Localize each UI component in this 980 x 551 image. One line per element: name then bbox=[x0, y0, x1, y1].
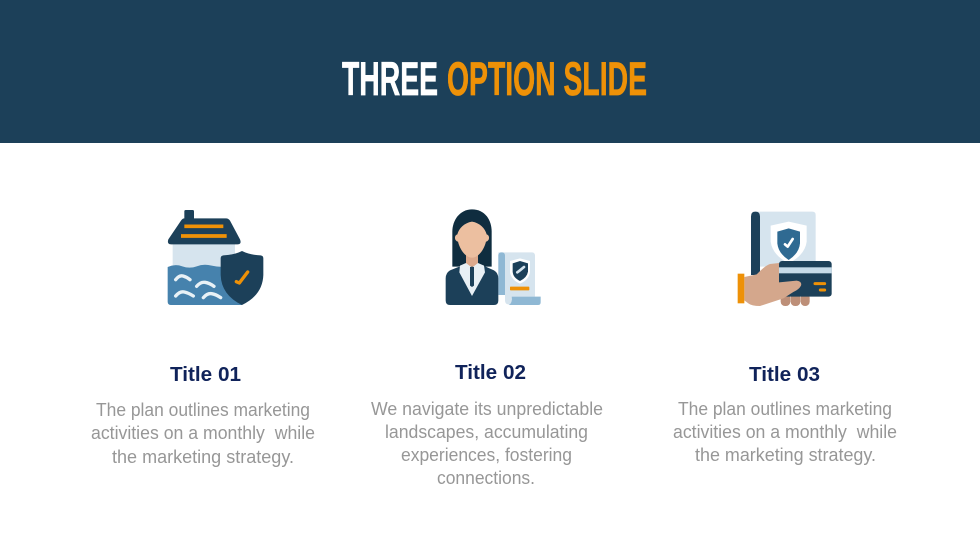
card orange lines bbox=[815, 284, 825, 290]
description 2 bbox=[371, 399, 603, 488]
chimney bbox=[184, 210, 194, 223]
title 02: Title 02 bbox=[455, 362, 526, 384]
hair bbox=[452, 209, 492, 267]
description 2: experiences, fostering bbox=[401, 445, 572, 465]
waves bbox=[176, 276, 221, 298]
shirt collar bbox=[459, 263, 485, 296]
tie bbox=[470, 267, 474, 287]
description 3: the marketing strategy. bbox=[695, 445, 876, 465]
check mark bbox=[236, 272, 248, 283]
roof bbox=[168, 218, 241, 244]
description 1: activities on a monthly while bbox=[91, 423, 315, 443]
credit card bbox=[779, 261, 832, 297]
option 3 bbox=[673, 364, 897, 465]
shield check bbox=[785, 239, 793, 247]
document orange line bbox=[510, 287, 529, 290]
description 2: We navigate its unpredictable bbox=[371, 399, 603, 419]
white shield bbox=[771, 222, 807, 263]
neck bbox=[466, 252, 478, 268]
description 1: The plan outlines marketing bbox=[96, 400, 310, 420]
title bbox=[342, 52, 647, 105]
document spine bbox=[498, 252, 505, 295]
blue shield bbox=[777, 228, 800, 260]
header band bbox=[0, 0, 980, 143]
jacket bbox=[446, 266, 498, 305]
description 3 bbox=[673, 399, 897, 465]
title 03: Title 03 bbox=[749, 364, 820, 386]
policy document bbox=[498, 252, 535, 304]
description 1: the marketing strategy. bbox=[112, 447, 294, 467]
document shield bbox=[510, 258, 530, 284]
option 2 bbox=[371, 362, 603, 488]
card stripe bbox=[779, 267, 832, 273]
flood water bbox=[168, 265, 242, 305]
fingers bbox=[781, 293, 810, 306]
document scroll foot bbox=[509, 297, 541, 305]
description 2: connections. bbox=[437, 468, 535, 488]
roof stripes bbox=[181, 226, 227, 236]
description 2: landscapes, accumulating bbox=[385, 422, 588, 442]
description 3: The plan outlines marketing bbox=[678, 399, 892, 419]
cuff bbox=[738, 274, 744, 303]
title: OPTION SLIDE bbox=[447, 52, 647, 105]
option 1 bbox=[91, 364, 315, 467]
document spine bbox=[751, 212, 760, 275]
shield bbox=[221, 251, 263, 305]
description 3: activities on a monthly while bbox=[673, 422, 897, 442]
house wall bbox=[173, 243, 235, 268]
icon: hand holding card and shield document bbox=[738, 212, 832, 306]
hand bbox=[744, 263, 801, 306]
icon: agent with policy document bbox=[446, 209, 541, 305]
title: THREE bbox=[342, 52, 438, 105]
icon: flooded house with shield bbox=[168, 210, 263, 305]
title 01: Title 01 bbox=[170, 364, 241, 386]
document bbox=[756, 212, 816, 267]
description 1 bbox=[91, 400, 315, 467]
face bbox=[455, 222, 489, 258]
